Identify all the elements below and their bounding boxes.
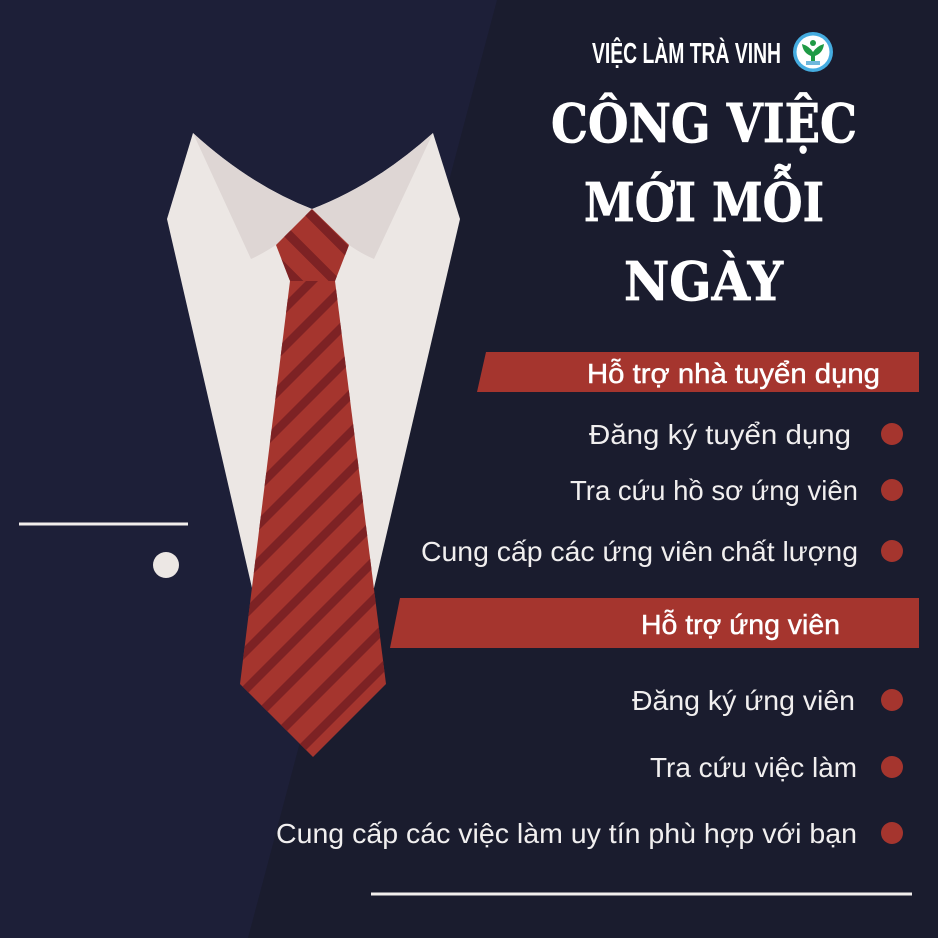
bullet — [881, 756, 903, 778]
item: reputable jobs: Cung cấp các việc làm uy tín phù hợp với bạn — [276, 818, 857, 849]
bullet — [881, 822, 903, 844]
panel: candidate support — [276, 598, 919, 849]
bullet — [881, 540, 903, 562]
item: quality candidates: Cung cấp các ứng viên chất lượng — [421, 536, 858, 567]
right collar — [312, 133, 433, 259]
bullet — [881, 689, 903, 711]
item: candidate registration: Đăng ký ứng viên — [632, 685, 855, 716]
banner: employer support — [477, 352, 919, 392]
item: employer registration: Đăng ký tuyển dụng — [589, 419, 851, 450]
decorative left line — [19, 522, 188, 526]
title — [551, 93, 857, 313]
brand name: VIỆC LÀM TRÀ VINH — [592, 36, 781, 70]
panel: employer support — [421, 352, 919, 567]
tie body — [240, 281, 386, 757]
title: NGÀY — [624, 251, 784, 313]
shirt — [167, 133, 460, 588]
illustration: shirt and tie — [167, 133, 460, 757]
heading: employer support: Hỗ trợ nhà tuyển dụng — [587, 358, 880, 389]
item: search resumes: Tra cứu hồ sơ ứng viên — [570, 475, 858, 506]
title: MỚI MỖI — [584, 165, 824, 234]
tie knot — [276, 209, 349, 281]
icon: logo — [793, 32, 833, 72]
decorative bottom line — [371, 892, 912, 896]
bullet — [881, 423, 903, 445]
bullet — [881, 479, 903, 501]
item: job search: Tra cứu việc làm — [650, 752, 857, 783]
title: CÔNG VIỆC — [551, 93, 857, 155]
heading: candidate support: Hỗ trợ ứng viên — [641, 609, 840, 640]
banner: candidate support — [390, 598, 919, 648]
neck opening — [193, 133, 433, 209]
left collar — [193, 133, 312, 259]
decorative left dot — [153, 552, 179, 578]
